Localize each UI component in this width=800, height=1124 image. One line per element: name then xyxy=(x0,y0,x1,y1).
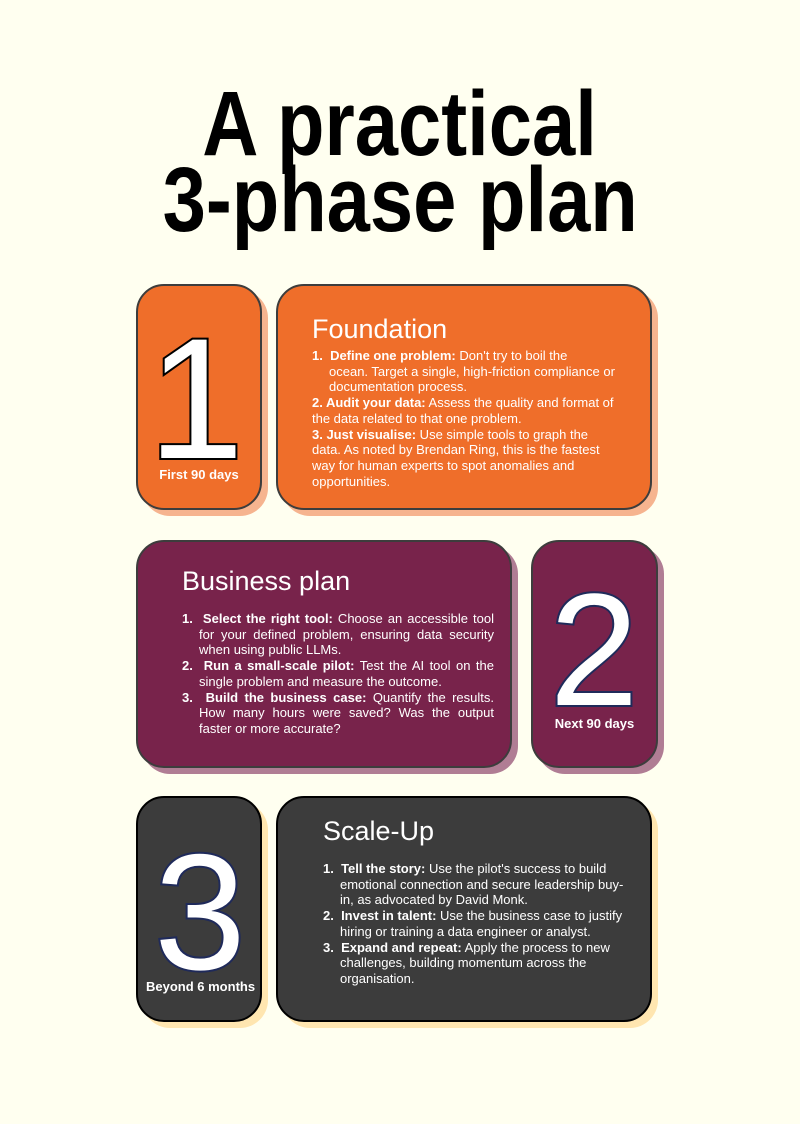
text: foundation steps: ocean. Target a single, high-friction compliance or documentation process. xyxy=(329,364,615,394)
text: business plan steps: 3. Build the business case: Quantify the results. How many hours were saved? Was the output faster or more accurate? xyxy=(182,690,494,736)
text: foundation steps xyxy=(312,348,615,489)
heading: business plan: Business plan xyxy=(182,566,350,596)
heading: foundation: Foundation xyxy=(312,314,447,344)
text: scale-up steps: 3. Expand and repeat: Apply the process to new challenges, building momentum across the organisation. xyxy=(323,940,610,986)
text: foundation steps: 3. Just visualise: Use simple tools to graph the data. As noted by Brendan Ring, this is the fastest way for human experts to spot anomalies and opportunities. xyxy=(312,427,600,489)
panel: phase 3 number xyxy=(136,796,268,1028)
panel: phase 1 number xyxy=(136,284,268,516)
text: scale-up steps xyxy=(323,861,623,986)
panel: foundation xyxy=(276,284,658,516)
icon: number 2: 2 xyxy=(550,560,638,739)
panel: scale-up xyxy=(276,796,658,1028)
title: 3-phase plan xyxy=(162,149,638,251)
text: business plan steps: 1. Select the right tool: Choose an accessible tool for your defined problem, ensuring data security when using public LLMs. xyxy=(182,611,494,657)
text: business plan steps xyxy=(182,611,494,736)
panel: business plan xyxy=(136,540,518,774)
title: A practical xyxy=(203,73,597,175)
heading: scale-up: Scale-Up xyxy=(323,816,434,846)
text: scale-up steps: 1. Tell the story: Use the pilot's success to build emotional connection and secure leadership buy-in, as advocated by David Monk. xyxy=(323,861,623,907)
text: business plan steps: 2. Run a small-scale pilot: Test the AI tool on the single problem and measure the outcome. xyxy=(182,658,494,689)
text: foundation steps: 2. Audit your data: Assess the quality and format of the data related to that one problem. xyxy=(312,395,614,426)
text: scale-up steps: 2. Invest in talent: Use the business case to justify hiring or training a data engineer or analyst. xyxy=(323,908,622,939)
title xyxy=(162,73,638,251)
label: first 90 days: First 90 days xyxy=(159,467,239,482)
label: beyond 6 months: Beyond 6 months xyxy=(146,979,255,994)
panel: phase 2 number xyxy=(531,540,664,774)
text: foundation steps: 1. Define one problem: Don't try to boil the xyxy=(312,348,567,363)
label: next 90 days: Next 90 days xyxy=(555,716,634,731)
